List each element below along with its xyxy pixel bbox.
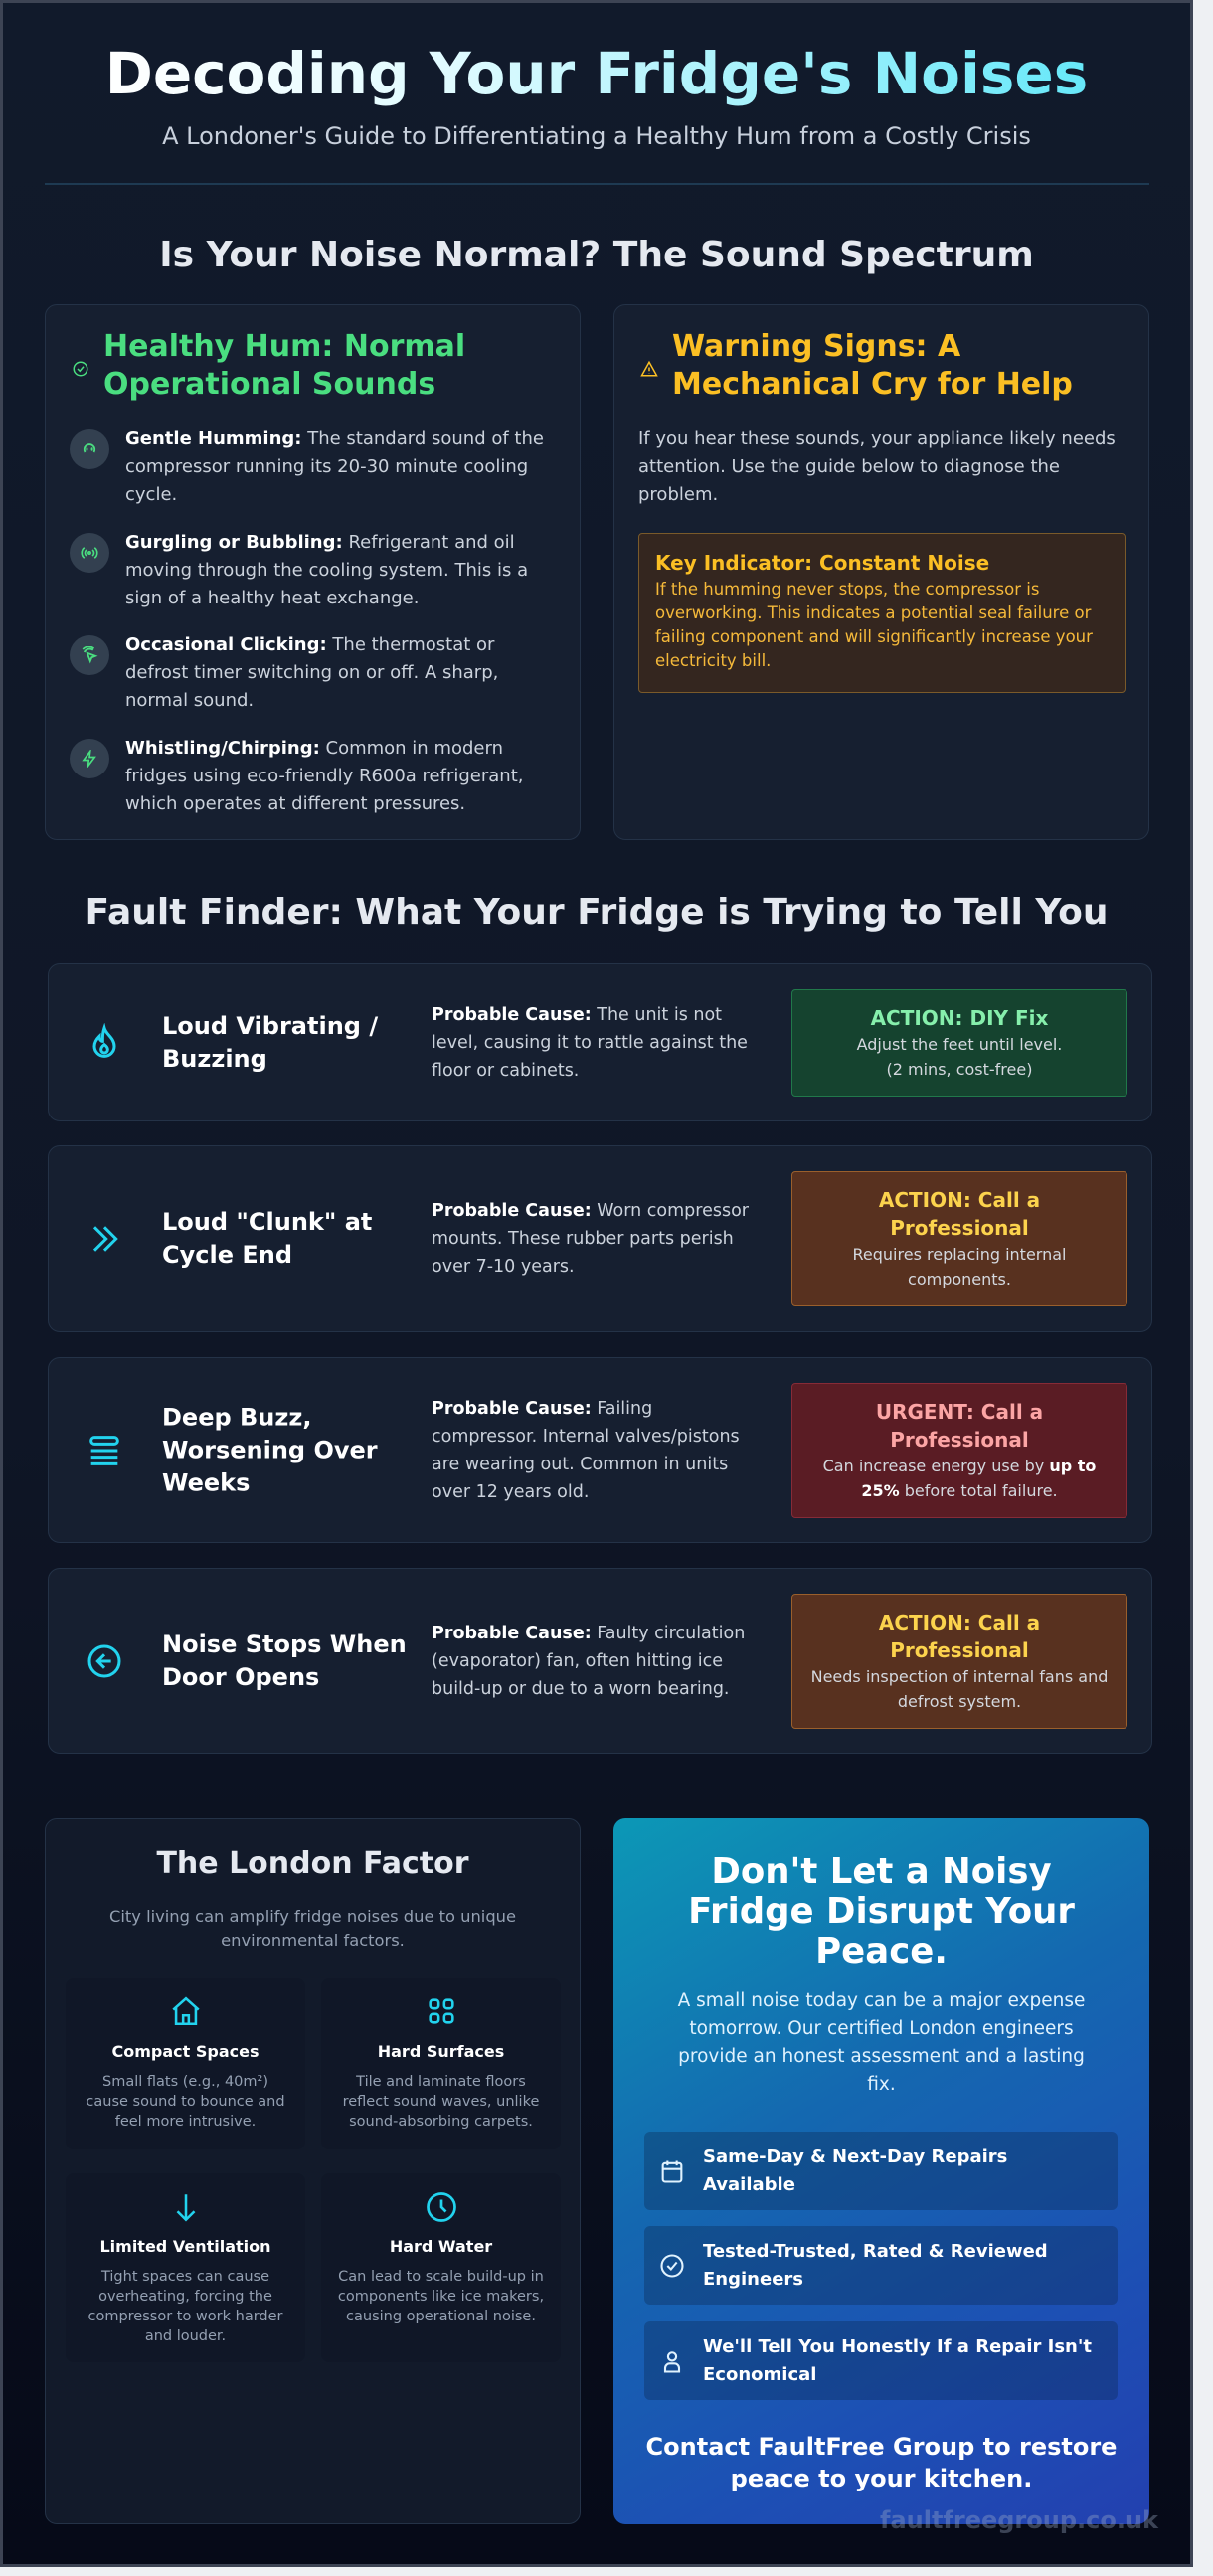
feature: same-day repairs: Available <box>703 2173 795 2195</box>
cell: hard water: Can lead to scale build-up in <box>338 2269 544 2285</box>
cell: hard water: Hard Water <box>390 2237 492 2256</box>
feature: same-day repairs: Same-Day & Next-Day Repairs <box>703 2146 1007 2167</box>
subtitle: A Londoner's Guide to Differentiating a Healthy Hum from a Costly Crisis <box>162 122 1031 150</box>
icon: check circle <box>74 362 87 376</box>
feature: trusted engineers: Engineers <box>703 2269 803 2289</box>
callout: action: Adjust the feet until level. <box>857 1034 1062 1054</box>
callout: action: Can increase energy use by up to 25% before total failure. <box>823 1456 1096 1499</box>
item: whistling <box>70 738 523 814</box>
callout: action: ACTION: DIY Fix <box>871 1006 1048 1030</box>
text: cta paragraph: A small noise today can be a major expense tomorrow. Our certified London engineers provide an honest assessment and a lasting <box>678 1990 1085 2067</box>
title: Decoding Your Fridge's Noises <box>105 40 1088 107</box>
panel: healthy hum: Occasional Clicking: The thermostat or defrost timer switching on or off. A sharp, normal sound. <box>125 634 498 711</box>
cell: compact spaces: Compact Spaces <box>111 2042 259 2061</box>
icon: flame <box>93 1023 115 1058</box>
panel: fault row 1 <box>48 963 1152 1121</box>
item: gentle humming <box>70 429 544 505</box>
text: fault title: Deep Buzz, Worsening Over Weeks <box>162 1403 378 1496</box>
icon: arrow left circle <box>87 1644 121 1678</box>
heading: london factor: The London Factor <box>156 1846 469 1881</box>
icon: person <box>664 2351 680 2372</box>
cell: limited ventilation <box>66 2173 305 2362</box>
callout: action <box>791 988 1127 1096</box>
text: fault title: Noise Stops When Door Opens <box>162 1631 407 1690</box>
heading: warning signs: Warning Signs: A Mechanical Cry for Help <box>672 329 1073 402</box>
panel: healthy hum: Whistling/Chirping: Common in modern fridges using eco-friendly R600a refrigerant, which operates at different pressures. <box>125 738 523 814</box>
callout: action: Needs inspection of internal fans and <box>811 1666 1108 1686</box>
cell: compact spaces: cause sound to bounce and feel more intrusive. <box>86 2094 285 2130</box>
callout: action: components. <box>908 1270 1011 1288</box>
icon: chevrons <box>93 1226 118 1252</box>
feature: trusted engineers: Tested-Trusted, Rated & Reviewed <box>703 2241 1048 2261</box>
icon: check badge <box>660 2255 684 2277</box>
callout: action: ACTION: Call a Professional <box>879 1188 1040 1240</box>
section heading: sound spectrum: Is Your Noise Normal? The Sound Spectrum <box>159 235 1034 275</box>
text: warning intro: If you hear these sounds, your appliance likely needs attention. Use the guide below to diagnose the problem. <box>638 429 1116 505</box>
panel: healthy hum: Gurgling or Bubbling: Refrigerant and oil moving through the cooling system. This is a sign of a healthy heat exchange. <box>125 532 528 608</box>
heading: cta: Don't Let a Noisy Fridge Disrupt Your Peace. <box>688 1851 1075 1972</box>
feature: honest advice: We'll Tell You Honestly If a Repair Isn't <box>703 2336 1092 2356</box>
panel: fault row 4 <box>48 1568 1152 1754</box>
cell: hard water: causing operational noise. <box>346 2309 536 2324</box>
text: london intro: City living can amplify fridge noises due to unique environmental factors. <box>109 1907 516 1950</box>
panel: warning signs <box>613 304 1149 840</box>
feature: honest advice: Economical <box>703 2364 816 2384</box>
cell: limited ventilation: Tight spaces can cause overheating, forcing the compressor to work harder and louder. <box>87 2269 283 2344</box>
callout: action <box>791 1171 1127 1306</box>
item: clicking <box>70 634 498 711</box>
cell: hard water <box>321 2173 561 2362</box>
text: probable cause: Probable Cause: Faulty circulation (evaporator) fan, often hitting ice build-up or due to a worn bearing. <box>432 1623 745 1698</box>
panel: call to action <box>613 1818 1149 2524</box>
icon: calendar <box>662 2161 682 2183</box>
callout: action: (2 mins, cost-free) <box>887 1060 1032 1078</box>
panel: london factor <box>45 1818 581 2524</box>
callout: action <box>791 1593 1127 1728</box>
cell: limited ventilation: Limited Ventilation <box>99 2237 271 2256</box>
text: fault title: Loud "Clunk" at Cycle End <box>162 1208 372 1269</box>
icon: grid <box>429 1998 454 2024</box>
heading: healthy hum: Healthy Hum: Normal Operational Sounds <box>103 329 465 402</box>
cell: hard surfaces: Tile and laminate floors reflect sound waves, unlike sound-absorbing carpets. <box>343 2074 539 2130</box>
callout: action: Requires replacing internal <box>853 1245 1066 1264</box>
callout: key indicator: Key Indicator: Constant Noise <box>655 551 989 575</box>
icon: stacked lines <box>89 1436 119 1465</box>
text: fault title: Loud Vibrating / Buzzing <box>162 1012 378 1072</box>
callout: key indicator <box>638 533 1126 693</box>
cell: compact spaces: Small flats (e.g., 40m²) <box>102 2074 268 2090</box>
item: gurgling <box>70 532 528 608</box>
cell: hard water: components like ice makers, <box>338 2289 544 2305</box>
panel: fault row 2 <box>48 1145 1152 1332</box>
cell: compact spaces <box>66 1978 305 2149</box>
icon: arrow down <box>177 2194 195 2221</box>
callout: action: ACTION: Call a Professional <box>879 1611 1040 1662</box>
text: cta paragraph: fix. <box>867 2074 896 2095</box>
panel: healthy hum <box>45 304 581 840</box>
feature: trusted engineers <box>644 2226 1118 2305</box>
icon: house <box>173 1996 199 2025</box>
panel: healthy hum: Gentle Humming: The standard sound of the compressor running its 20-30 minute cooling cycle. <box>125 429 544 505</box>
text: contact: Contact FaultFree Group to restore peace to your kitchen. <box>646 2433 1117 2492</box>
icon: clock <box>427 2192 456 2222</box>
callout: action: defrost system. <box>898 1692 1021 1710</box>
icon: warning triangle <box>640 360 658 376</box>
cell: hard surfaces: Hard Surfaces <box>378 2042 504 2061</box>
callout: key indicator: If the humming never stops, the compressor is overworking. This indicates a potential seal failure or failing component and will significantly increase your electricity bill. <box>655 580 1093 670</box>
section heading: fault finder: Fault Finder: What Your Fridge is Trying to Tell You <box>86 892 1108 933</box>
feature: same-day repairs <box>644 2132 1118 2210</box>
callout: action <box>791 1382 1127 1517</box>
text: probable cause: Probable Cause: Worn compressor mounts. These rubber parts perish over 7-10 years. <box>432 1201 749 1277</box>
callout: action: URGENT: Call a Professional <box>876 1400 1043 1452</box>
panel: fault row 3 <box>48 1357 1152 1543</box>
cell: hard surfaces <box>321 1978 561 2149</box>
text: probable cause: Probable Cause: The unit is not level, causing it to rattle against the floor or cabinets. <box>432 1004 748 1080</box>
text: probable cause: Probable Cause: Failing compressor. Internal valves/pistons are wearing out. Common in units over 12 years old. <box>432 1398 740 1501</box>
text: watermark: faultfreegroup.co.uk <box>880 2506 1158 2534</box>
feature: honest advice <box>644 2321 1118 2400</box>
